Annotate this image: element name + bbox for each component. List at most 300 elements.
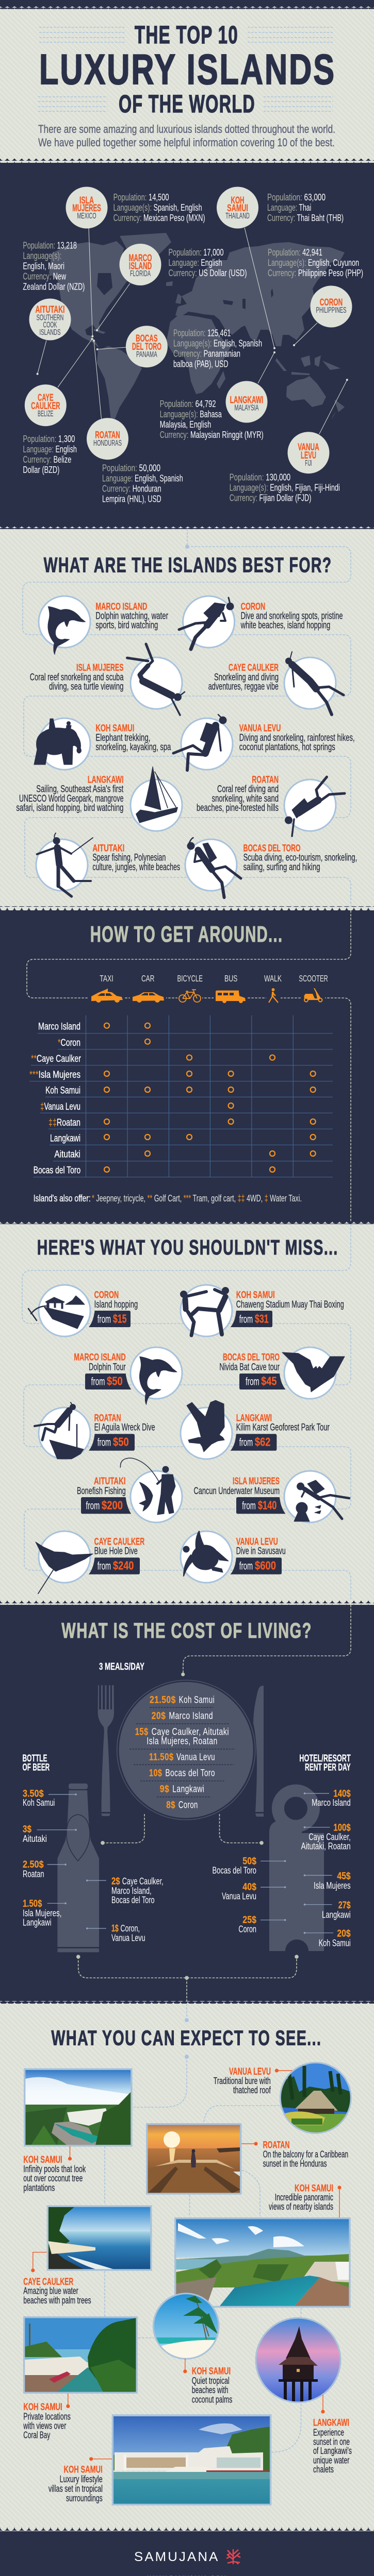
callout: Caye Caulker: beaches with palm trees — [23, 2295, 91, 2306]
hotel price list: Isla Mujeres — [314, 1880, 351, 1891]
panel: title — [38, 22, 336, 149]
callout: Koh Samui private locations — [23, 2394, 71, 2441]
map marker: Caye Caulker — [25, 384, 67, 426]
info: Marco Island: Language: English — [168, 257, 222, 268]
map marker: Aitutaki — [29, 299, 71, 340]
info: Isla Mujeres — [113, 192, 205, 223]
plate price list: 10$ — [149, 1767, 162, 1778]
info: Aitutaki: Zealand Dollar (NZD) — [23, 281, 85, 292]
info: Koh Samui: Currency: Thai Baht (THB) — [267, 212, 344, 223]
item: Caye Caulker tour: CAYE CAULKER — [94, 1536, 144, 1547]
photo: tropical palm beach — [153, 2293, 219, 2360]
beer price list: 1$ — [111, 1923, 119, 1934]
table footnote: * Jeepney, tricycle, ** Golf Cart, *** Tram, golf cart, ‡‡ 4WD, ‡ Water Taxi. — [92, 1193, 302, 1204]
callout: Koh Samui quiet beaches: KOH SAMUI — [192, 2366, 231, 2377]
info: Roatan: Population: 50,000 — [102, 462, 160, 473]
hotel price list: 140$ — [333, 1788, 351, 1799]
beer price list: Aitutaki — [23, 1833, 47, 1844]
price tag: $140 — [258, 1498, 277, 1512]
callout: Caye Caulker: Amazing blue water — [23, 2285, 78, 2296]
top dark band — [0, 0, 374, 6]
item: Roatan best for: beaches, pine-forested hills — [197, 803, 279, 814]
price tag: $600 — [255, 1559, 276, 1572]
table row labels: Langkawi — [50, 1133, 80, 1144]
icon: car — [130, 992, 166, 1003]
map marker: Isla Mujeres: MEXICO — [77, 212, 96, 221]
plate price list: 8$ — [166, 1799, 175, 1810]
info: Marco Island: Population: 17,000 — [168, 247, 223, 258]
price tag — [231, 1434, 277, 1451]
hotel price list: 25$ — [242, 1914, 256, 1925]
icon: sea turtle — [183, 1531, 229, 1576]
item: Aitutaki best for: Spear fishing, Polynesian — [92, 853, 166, 863]
price tag: $31 — [255, 1312, 269, 1326]
icon: walker — [266, 988, 281, 1003]
map marker: Vanua Levu: FIJI — [305, 459, 312, 468]
beer price list: Vanua Levu — [111, 1932, 145, 1943]
photo: Koh Samui infinity pool — [25, 2069, 132, 2146]
beer price list: 2.50$ — [23, 1859, 44, 1870]
hotel price list: Koh Samui — [319, 1937, 351, 1948]
table availability rings — [104, 1023, 316, 1172]
map leader lines — [38, 228, 347, 434]
callout: Langkawi: LANGKAWI — [313, 2417, 349, 2429]
dashed route: best for section — [23, 529, 351, 910]
callout: Koh Samui private locations: Private locations — [23, 2411, 71, 2421]
callout: Koh Samui panoramic views: KOH SAMUI — [295, 2182, 333, 2194]
map marker: Roatan — [87, 418, 128, 460]
callout: Roatan balcony — [241, 2139, 348, 2169]
plate price list: 20$ — [152, 1710, 166, 1722]
icon: bicycle — [177, 990, 202, 1002]
info: Aitutaki: Currency: New — [23, 271, 67, 281]
info: Bocas del Toro: balboa (PAB), USD — [173, 359, 228, 369]
beer price list: 3$ — [23, 1824, 31, 1835]
icon: scuba diver — [179, 598, 234, 649]
item: Roatan best for: Coral reef diving and — [217, 784, 279, 795]
callout: Langkawi: sunset in one — [313, 2436, 350, 2447]
item: Vanua Levu tour: VANUA LEVU — [236, 1536, 278, 1547]
map marker: Bocas del Toro — [126, 326, 168, 367]
callout: Koh Samui infinity pools: KOH SAMUI — [23, 2154, 62, 2165]
item: Roatan best for — [197, 774, 345, 836]
beer price list: 1.50$ — [23, 1898, 42, 1909]
table row labels: ***Isla Mujeres — [29, 1070, 80, 1080]
map marker: Caye Caulker: BELIZE — [38, 410, 54, 418]
info: Langkawi: Malaysia, English — [160, 419, 211, 430]
callout: Langkawi — [313, 2395, 352, 2475]
info: Aitutaki — [23, 240, 85, 292]
map marker: Langkawi: LANGKAWI — [230, 395, 263, 406]
icon: scuba diver kicking — [173, 715, 226, 770]
price tag: from — [97, 1561, 111, 1572]
icon: outrigger boat — [28, 1296, 85, 1329]
plate price list: 9$ — [160, 1783, 169, 1794]
info: Coron: Population: 42,941 — [268, 247, 322, 258]
info: Koh Samui: Language: Thai — [267, 202, 311, 213]
hotel price list: Bocas del Toro — [213, 1865, 256, 1876]
info: Langkawi: Population: 64,792 — [160, 398, 216, 409]
item: Marco Island tour: MARCO ISLAND — [74, 1352, 126, 1363]
item: Langkawi tour — [181, 1400, 330, 1459]
map marker: Bocas del Toro: PANAMA — [136, 350, 157, 359]
table row labels: *Coron — [58, 1038, 80, 1048]
transport column headers: TAXI — [100, 973, 113, 984]
info: Vanua Levu: Population: 130,000 — [230, 472, 290, 483]
callout: Langkawi: Experience — [313, 2427, 344, 2437]
info: Vanua Levu: Currency: Fijian Dollar (FJD) — [230, 493, 311, 503]
info: Caye Caulker — [23, 433, 77, 475]
plate price list: 21.50$ — [150, 1694, 176, 1706]
table row labels: Bocas del Toro — [34, 1165, 80, 1176]
beer price list: Coron, — [121, 1923, 140, 1934]
plate price list: Marco Island — [169, 1710, 213, 1722]
item: Roatan best for: ROATAN — [252, 774, 279, 785]
callout: Koh Samui private locations: Coral Bay — [23, 2430, 51, 2441]
photo: Roatan balcony sunset — [147, 2124, 241, 2194]
item: Coron best for — [179, 596, 343, 649]
hotel price list: 100$ — [333, 1822, 351, 1833]
icon: coral — [226, 2549, 240, 2564]
info: Bocas del Toro: Language(s): English, Spanish — [173, 338, 262, 349]
beer price list: Isla Mujeres, — [23, 1907, 61, 1918]
table row labels: ‡Vanua Levu — [40, 1101, 80, 1112]
info: Bocas del Toro: Population: 125,461 — [173, 328, 231, 338]
map marker: Coron: PHILIPPINES — [316, 306, 347, 315]
info: Aitutaki: Language(s): — [23, 250, 61, 261]
item: Aitutaki best for: AITUTAKI — [92, 842, 124, 854]
map marker: Marco Island: FLORIDA — [130, 269, 151, 278]
hotel price list: 20$ — [337, 1928, 351, 1939]
world map — [49, 233, 345, 420]
map marker: Isla Mujeres — [66, 187, 107, 229]
hotel price list: Vanua Levu — [222, 1891, 256, 1902]
item: Langkawi best for: UNESCO World Geopark, mangrove — [19, 793, 124, 804]
plate price list: Caye Caulker, Aitutaki — [152, 1726, 229, 1738]
info: Langkawi: Language(s): Bahasa — [160, 409, 222, 419]
hotel price list: 27$ — [338, 1900, 351, 1911]
icon: fisherman and fish — [120, 1458, 175, 1515]
map marker: Marco Island — [120, 244, 161, 285]
illustration: beer bottle — [57, 1784, 99, 1952]
callout: Vanua Levu bure: thatched roof — [233, 2084, 271, 2095]
dashed route: cost section — [76, 1605, 351, 2002]
photo: Koh Samui panoramic pool — [175, 2218, 350, 2307]
icon: fork — [98, 1685, 114, 1812]
callout: Koh Samui quiet beaches: coconut palms — [192, 2394, 232, 2405]
callout: Vanua Levu bure: Traditional bure with — [214, 2075, 271, 2086]
item: Coron tour: CORON — [94, 1289, 119, 1300]
map marker: Vanua Levu: LEVU — [301, 450, 316, 461]
item: Bocas del Toro best for: BOCAS DEL TORO — [243, 842, 301, 854]
icon: sailboat — [136, 767, 177, 823]
illustration: hotel door hanger — [269, 1791, 324, 1951]
info: Coron — [268, 247, 363, 278]
map marker: Koh Samui: SAMUI — [227, 202, 248, 214]
map marker: Caye Caulker: CAYE — [38, 392, 54, 403]
table row labels: Aitutaki — [54, 1149, 80, 1160]
callout: Roatan balcony: ROATAN — [263, 2139, 289, 2150]
beer price list: Koh Samui — [23, 1797, 55, 1808]
table row labels: ‡‡Roatan — [48, 1117, 80, 1128]
info: Isla Mujeres: Currency: Mexican Peso (MXN) — [113, 212, 205, 223]
callout: Koh Samui infinity pools: Infinity pools that look — [23, 2163, 86, 2174]
info: Bocas del Toro: Currency: Panamanian — [173, 348, 240, 359]
callout: Koh Samui lifestyle villas: Luxury lifestyle — [60, 2473, 103, 2484]
callout: Caye Caulker: CAYE CAULKER — [23, 2276, 73, 2287]
info: Caye Caulker: Dollar (BZD) — [23, 464, 59, 475]
map marker: Langkawi: MALAYSIA — [234, 404, 259, 413]
map marker: Vanua Levu — [288, 432, 329, 473]
dashed route: shouldn't miss section — [22, 1224, 351, 1601]
plate price list: 15$ — [135, 1726, 149, 1738]
intro text — [38, 123, 335, 149]
map marker: Aitutaki: ISLANDS — [39, 328, 61, 337]
dashed route: photo section — [105, 2004, 301, 2452]
price tag — [231, 1311, 272, 1327]
info: Vanua Levu: Language(s): English, Fijian, Fiji-Hindi — [230, 482, 340, 493]
icon: eagle — [187, 1400, 224, 1452]
photo: Koh Samui Coral Bay — [24, 2317, 137, 2393]
item: Vanua Levu tour: Dive in Savusavu — [236, 1546, 286, 1557]
map marker: Koh Samui: THAILAND — [225, 212, 250, 221]
map marker: Aitutaki: COOK — [43, 321, 57, 330]
table grid — [29, 1015, 333, 1177]
info: Marco Island — [168, 247, 247, 278]
item: Marco Island best for: MARCO ISLAND — [95, 601, 147, 612]
price tag — [89, 1557, 140, 1574]
map marker: Marco Island: ISLAND — [129, 261, 152, 272]
title line: Of The World: OF THE WORLD — [119, 91, 255, 118]
heading: bottle of beer — [23, 1753, 50, 1773]
hotel price list: Marco Island — [312, 1797, 351, 1808]
item: Marco Island tour — [74, 1347, 182, 1405]
plate gap details — [101, 1814, 264, 1817]
item: Koh Samui best for: snorkeling, kayaking, spa — [95, 742, 171, 753]
icon: knife — [253, 1686, 264, 1812]
item: Bocas del Toro tour: Nivida Bat Cave tour — [219, 1362, 280, 1372]
map marker: Coron — [311, 285, 352, 328]
hotel price list: 50$ — [242, 1855, 256, 1867]
item: Aitutaki tour: Bonefish Fishing — [77, 1486, 126, 1497]
dashed route: transport section — [27, 910, 351, 1222]
beer price list — [23, 1788, 164, 1943]
hotel price list: 40$ — [242, 1881, 256, 1892]
heading: how to get around: HOW TO GET AROUND... — [90, 922, 283, 947]
callout: Roatan balcony: sunset in the Honduras — [263, 2158, 327, 2169]
info: Koh Samui — [267, 192, 344, 223]
info: Isla Mujeres: Population: 14,500 — [113, 192, 169, 202]
item: Coron tour: Island hopping — [94, 1299, 138, 1310]
item: Langkawi tour: Kilim Karst Geoforest Park Tour — [236, 1422, 330, 1433]
map marker: Isla Mujeres: ISLA — [79, 195, 94, 206]
price tag: from — [239, 1437, 253, 1449]
price tag: from — [242, 1500, 256, 1512]
item: Marco Island best for: sports, bird watching — [95, 620, 158, 631]
panel: dark map section — [0, 159, 374, 527]
map marker: Aitutaki: AITUTAKI — [35, 304, 65, 315]
item: Langkawi best for: safari, island hopping, bird watching — [16, 803, 123, 814]
icon: spear fisher — [37, 833, 93, 896]
item: Caye Caulker best for: CAYE CAULKER — [229, 662, 279, 673]
callout: Langkawi: of Langkawi's — [313, 2445, 352, 2456]
info: Roatan: Currency: Honduran — [102, 483, 161, 494]
table row labels: Koh Samui — [45, 1086, 80, 1096]
table footnote: Island's also offer: — [34, 1193, 91, 1204]
item: Langkawi best for — [16, 767, 182, 831]
transport column headers: BUS — [224, 973, 237, 984]
plate price list: Koh Samui — [179, 1694, 215, 1706]
price tag — [89, 1434, 135, 1451]
icon: dolphin — [139, 1357, 177, 1405]
item: Roatan best for: snorkeling, white sand — [212, 793, 279, 804]
beer price list: Caye Caulker, — [122, 1876, 164, 1887]
callout: Vanua Levu bure: VANUA LEVU — [229, 2066, 271, 2077]
item: Coron best for: CORON — [241, 601, 265, 612]
info: Vanua Levu — [230, 472, 340, 503]
icon: scuba diver with tank — [187, 838, 241, 897]
item: Bocas del Toro tour — [219, 1347, 345, 1399]
item: Isla Mujeres tour — [194, 1471, 349, 1522]
item: Isla Mujeres best for — [30, 644, 185, 715]
price tag: from — [91, 1376, 105, 1388]
callout: Langkawi: chalets — [313, 2464, 334, 2475]
hotel price list: Caye Caulker, — [308, 1832, 351, 1842]
icon: manta ray — [36, 1542, 93, 1594]
beer price list: Marco Island, — [111, 1885, 152, 1896]
item: Vanua Levu tour — [181, 1531, 286, 1583]
plate price list: Coron — [178, 1799, 198, 1810]
hotel price list: Langkawi — [322, 1909, 351, 1920]
item: Aitutaki tour: AITUTAKI — [94, 1476, 126, 1487]
callout: Koh Samui panoramic views — [269, 2182, 342, 2217]
icon: muay thai boxers — [181, 1287, 229, 1335]
map marker: Roatan: HONDURAS — [93, 439, 122, 448]
info: Marco Island: Currency: US Dollar (USD) — [168, 267, 247, 278]
plate price list: Bocas del Toro — [165, 1767, 215, 1778]
item: Vanua Levu best for: coconut plantations, hot springs — [239, 742, 335, 753]
hotel price list — [213, 1788, 351, 1948]
transport column headers: BICYCLE — [177, 973, 203, 984]
price tag: $62 — [255, 1435, 270, 1449]
plate price list: Isla Mujeres, Roatan — [147, 1736, 218, 1747]
item: Bocas del Toro best for: sailing, surfing and hiking — [243, 862, 320, 873]
beer price list: Bocas del Toro — [111, 1894, 155, 1905]
map marker: Koh Samui — [217, 187, 258, 229]
label: 3 meals/day: 3 MEALS/DAY — [99, 1661, 144, 1672]
item: Roatan tour — [35, 1402, 155, 1459]
info: Isla Mujeres: Language(s): Spanish, English — [113, 202, 202, 213]
table row labels: Marco Island — [38, 1021, 80, 1032]
plate price list: 11.50$ — [149, 1752, 174, 1763]
item: Aitutaki tour — [77, 1458, 182, 1522]
info: Langkawi: Currency: Malaysian Ringgit (MYR) — [160, 429, 264, 440]
info: Roatan: Lempira (HNL), USD — [102, 493, 161, 504]
callout: Koh Samui panoramic views: views of nearby islands — [269, 2201, 333, 2212]
map marker: Isla Mujeres: MUJERES — [72, 202, 101, 214]
icon: bus — [214, 990, 248, 1003]
heading: hotel rent — [299, 1753, 351, 1773]
info: Roatan: Language: English, Spanish — [102, 472, 183, 483]
transport column headers — [100, 973, 328, 984]
info: Roatan — [102, 462, 183, 504]
callout: Koh Samui private locations: KOH SAMUI — [23, 2401, 62, 2413]
callout: Koh Samui lifestyle villas: villas set in tropical — [48, 2483, 103, 2494]
item: Koh Samui tour — [181, 1285, 344, 1336]
hotel price list: 45$ — [337, 1871, 351, 1882]
map marker: Langkawi — [226, 381, 267, 422]
callout: Koh Samui quiet beaches: Quiet tropical — [192, 2375, 230, 2386]
heading: bottle of beer: BOTTLE — [23, 1753, 47, 1764]
info: Aitutaki: Population: 13,218 — [23, 240, 77, 250]
item: Marco Island best for: Dolphin watching, water — [95, 611, 168, 621]
icon: snorkeler diving — [127, 644, 185, 715]
item: Isla Mujeres best for: diving, sea turtle viewing — [49, 681, 124, 692]
beer price list: Roatan — [23, 1868, 44, 1879]
price tag — [81, 1497, 131, 1514]
price tag: $50 — [113, 1435, 129, 1449]
price tag: $45 — [261, 1375, 277, 1388]
item: Langkawi best for: Sailing, Southeast Asia's first — [36, 784, 124, 795]
callout: Koh Samui infinity pools — [23, 2146, 86, 2193]
icon: diver descending — [285, 777, 345, 836]
item: Marco Island best for — [39, 596, 168, 655]
item: Caye Caulker tour: Blue Hole Dive — [94, 1546, 138, 1557]
item: Koh Samui best for — [34, 718, 171, 770]
item: Isla Mujeres best for: Coral reef snorkeling and scuba — [30, 672, 124, 683]
item: Koh Samui best for: KOH SAMUI — [95, 722, 134, 734]
map marker: Koh Samui: KOH — [231, 195, 245, 206]
item: Isla Mujeres best for: ISLA MUJERES — [76, 662, 124, 673]
beer price list: 2$ — [111, 1876, 120, 1887]
price tag — [239, 1374, 286, 1389]
info: Caye Caulker: Currency: Belize — [23, 454, 71, 465]
map marker: Bocas del Toro: DEL TORO — [132, 341, 161, 352]
photo: Koh Samui luxury villa — [112, 2415, 271, 2504]
beer price list: Langkawi — [23, 1917, 52, 1927]
item: Langkawi best for: LANGKAWI — [88, 774, 124, 785]
heading: bottle of beer: OF BEER — [23, 1762, 50, 1773]
callout: Koh Samui lifestyle villas — [48, 2457, 112, 2503]
info: Langkawi — [160, 398, 264, 440]
item: Koh Samui best for: Elephant trekking, — [95, 733, 150, 743]
item: Coron tour — [28, 1285, 138, 1336]
item: Caye Caulker best for — [208, 652, 344, 715]
callout: Koh Samui quiet beaches: beaches with — [192, 2384, 228, 2395]
callout: Koh Samui lifestyle villas: surroundings — [66, 2493, 103, 2503]
price tag: from — [239, 1561, 253, 1572]
item: Aitutaki best for — [36, 833, 180, 896]
transport column headers: CAR — [141, 973, 154, 984]
item: Isla Mujeres tour: ISLA MUJERES — [233, 1476, 280, 1487]
icon: taxi — [89, 989, 125, 1003]
icon: bat — [282, 1352, 345, 1392]
map marker: Vanua Levu: VANUA — [298, 442, 319, 453]
callout: Caye Caulker — [23, 2252, 91, 2306]
photo: Langkawi water chalet — [256, 2317, 341, 2403]
plate price list — [135, 1694, 229, 1810]
price tag — [89, 1311, 131, 1327]
price tag — [236, 1497, 286, 1514]
plate price list: Vanua Levu — [176, 1752, 215, 1763]
item: Caye Caulker tour — [36, 1531, 144, 1594]
price tag: $240 — [113, 1559, 134, 1572]
price tag: from — [97, 1314, 111, 1326]
map marker: Coron: CORON — [320, 297, 343, 308]
item: Vanua Levu best for — [173, 715, 355, 770]
panel: footer — [0, 2527, 374, 2576]
callout: Vanua Levu bure — [214, 2066, 292, 2095]
